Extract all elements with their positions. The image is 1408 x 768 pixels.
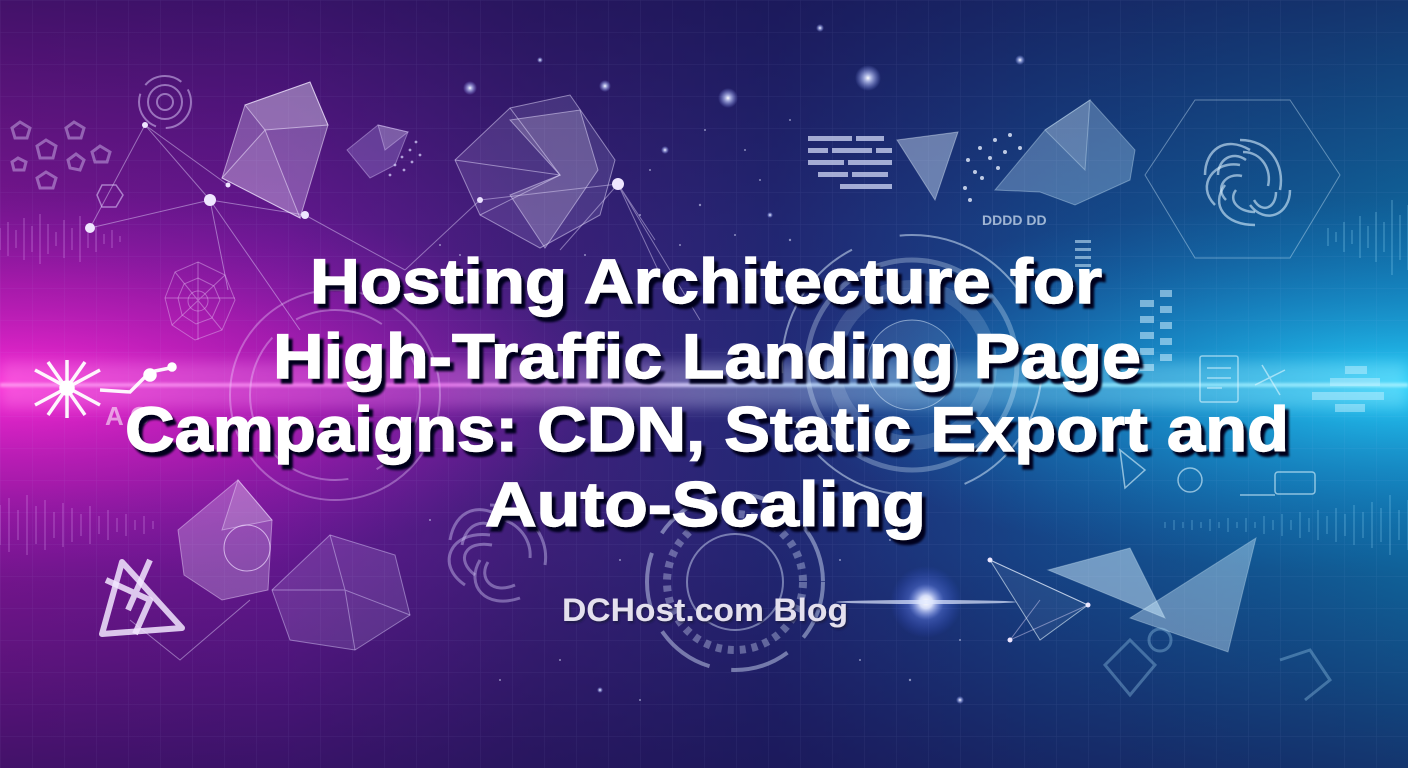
low-poly shape: small gem [347, 125, 408, 178]
icon: white snowflake network left [35, 360, 175, 418]
title [125, 247, 1289, 540]
triangle gem: top right [897, 132, 958, 200]
right side dashed tower [1075, 240, 1172, 371]
title: Auto-Scaling [485, 470, 926, 540]
icon: spider web [165, 262, 235, 340]
network lines [90, 125, 1088, 660]
diamond outlines: lower right [1105, 629, 1330, 700]
low-poly shape: top centre [455, 95, 615, 248]
icon: small octagon [97, 185, 123, 207]
network triangle: lower right [990, 560, 1088, 640]
light beam [0, 362, 1408, 408]
star dust [429, 119, 961, 701]
icon: white triangular knot [102, 560, 182, 634]
waveform bands [0, 200, 1408, 555]
title: Hosting Architecture for [310, 247, 1102, 317]
low-poly paper plane: lower right [1048, 538, 1256, 652]
subtitle: DCHost.com Blog [562, 592, 848, 628]
low-poly shape: lower mid left [272, 535, 410, 650]
brick icon: top right [808, 136, 892, 189]
small text glyphs: DDDD DD [982, 212, 1047, 228]
large ring left lower [230, 290, 440, 500]
low-poly shape: top left [222, 82, 328, 218]
dots cluster: top right [963, 133, 1022, 202]
large ring centre right [782, 235, 1042, 495]
low-poly shape: top right [995, 100, 1135, 205]
label: faint AO glyphs: A O [105, 401, 150, 431]
low-poly shape: lower left [178, 480, 272, 600]
icon cluster: top left hexagons [12, 122, 110, 188]
stacked bars far right [1312, 366, 1384, 412]
title: Campaigns: CDN, Static Export and [125, 395, 1289, 465]
dot cluster: top centre [389, 141, 421, 176]
title: High-Traffic Landing Page [273, 322, 1141, 392]
rings: bottom centre [647, 494, 823, 670]
document icon right [1120, 356, 1315, 495]
icon: concentric circle top left [139, 76, 191, 128]
hexagon with swirl [1145, 100, 1340, 258]
spiral: bottom centre left [449, 505, 546, 601]
network nodes [85, 122, 1090, 642]
stars [463, 24, 1025, 704]
